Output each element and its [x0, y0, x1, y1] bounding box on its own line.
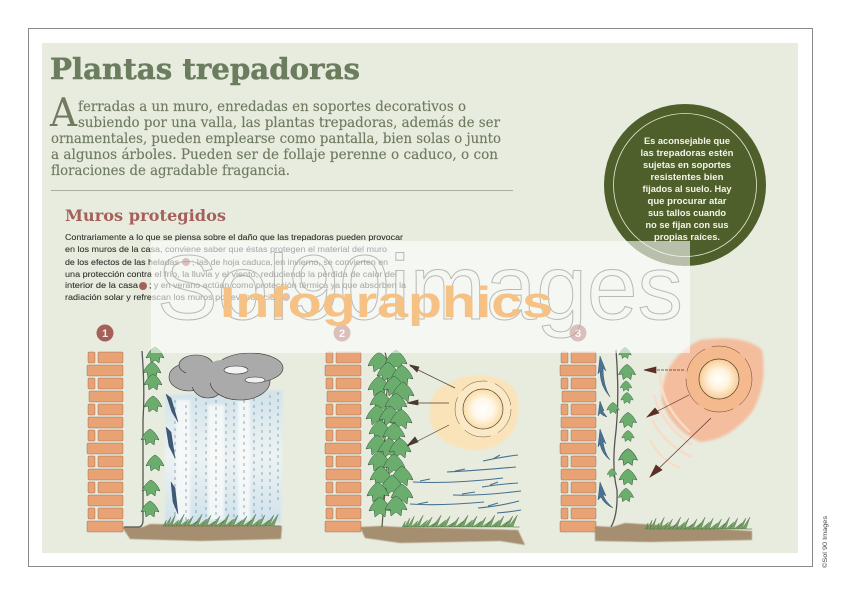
ivy leaves 1: [141, 347, 164, 517]
callout: green circle advice: [604, 104, 766, 266]
intro text block: subiendo por una valla, las plantas trepadoras, además de ser: [78, 115, 501, 131]
illustration 3: summer sun: [560, 324, 764, 542]
brick wall 1: [87, 352, 123, 532]
illustration 2: winter sun and wind: [325, 324, 525, 545]
callout: green circle advice: no se fijan con sus: [646, 220, 729, 230]
wind lines: [410, 455, 521, 513]
body text block: una protección contra el frío, la lluvia y el viento, reduciendo la pérdida de calor del: [65, 270, 397, 279]
watermark: Infographics: Infographics: [220, 278, 553, 327]
callout: green circle advice: fijados al suelo. Hay: [642, 184, 732, 194]
grass 2: [402, 515, 520, 527]
callout: green circle advice: sus tallos cuando: [648, 208, 727, 218]
brick wall 3: [560, 352, 596, 532]
panel: green background: [42, 43, 798, 553]
body text block: ; las de hoja caduca, en invierno, se convierten en: [192, 258, 388, 267]
intro text block: ferradas a un muro, enredadas en soportes decorativos o: [78, 99, 466, 115]
body text block: ; y en verano actúan como protección térmica ya que absorben la: [149, 281, 407, 290]
intro text block: ornamentales, pueden emplearse como pantalla, bien solas o junto: [51, 131, 501, 147]
ground 3: [595, 523, 752, 542]
ivy 2: [366, 350, 414, 527]
number badge 3: [570, 324, 586, 342]
sun 3: [650, 338, 764, 468]
intro text block: a algunos árboles. Pueden ser de follaje perenne o caduco, o con: [51, 147, 498, 163]
illustration 1: rain: [87, 324, 283, 541]
ivy 3: [607, 347, 637, 527]
callout: green circle advice: sujetas en soportes: [643, 160, 731, 170]
ground 1: [122, 524, 282, 541]
rain arrows 1: [166, 394, 178, 514]
heading: Muros protegidos: Muros protegidos: [65, 206, 226, 225]
intro text block: floraciones de agradable fragancia.: [51, 163, 290, 179]
number badge 3: 3: [575, 328, 581, 340]
callout: green circle advice: que procurar atar: [648, 196, 727, 206]
grass 1: [163, 514, 281, 526]
sun arrows 3: [644, 367, 711, 477]
number badge 2: [334, 324, 350, 342]
callout: green circle advice: resistentes bien: [650, 172, 724, 182]
ivy stem 1: [124, 351, 144, 527]
air arrows 3: [598, 356, 613, 508]
callout: green circle advice: propias raíces.: [654, 232, 720, 242]
body text block: en los muros de la casa, conviene saber que éstas protegen el material del muro: [65, 245, 388, 254]
intro text block: [49, 91, 501, 179]
brick wall 2: [325, 352, 361, 532]
callout: green circle advice: las trepadoras estén: [640, 148, 734, 158]
ground 2: [360, 526, 525, 545]
number badge 1: [96, 324, 114, 342]
body text block: radiación solar y refrescan los muros por evaporación: [65, 293, 280, 302]
body text block: interior de la casa: [65, 281, 139, 290]
intro text block: A: [49, 91, 78, 136]
sun 2: [430, 376, 519, 450]
number badge 1: 1: [102, 328, 108, 340]
body text block: Contrariamente a lo que se piensa sobre el daño que las trepadoras pueden provocar: [65, 233, 403, 242]
watermark: Sol90images: Sol90images: [157, 237, 683, 339]
rain curtain: [165, 390, 283, 524]
title: Plantas trepadoras: [50, 52, 360, 86]
number badge 2: 2: [339, 328, 345, 340]
body text block: de los efectos de las heladas: [65, 258, 179, 267]
sun arrows 2: [407, 365, 455, 446]
credit: ©Sol 90 Images: [822, 516, 829, 568]
cloud: [169, 353, 283, 400]
watermark overlay band: [151, 241, 690, 353]
callout: green circle advice: Es aconsejable que: [644, 136, 730, 146]
body text block: [65, 233, 407, 302]
grass 3: [645, 517, 752, 529]
